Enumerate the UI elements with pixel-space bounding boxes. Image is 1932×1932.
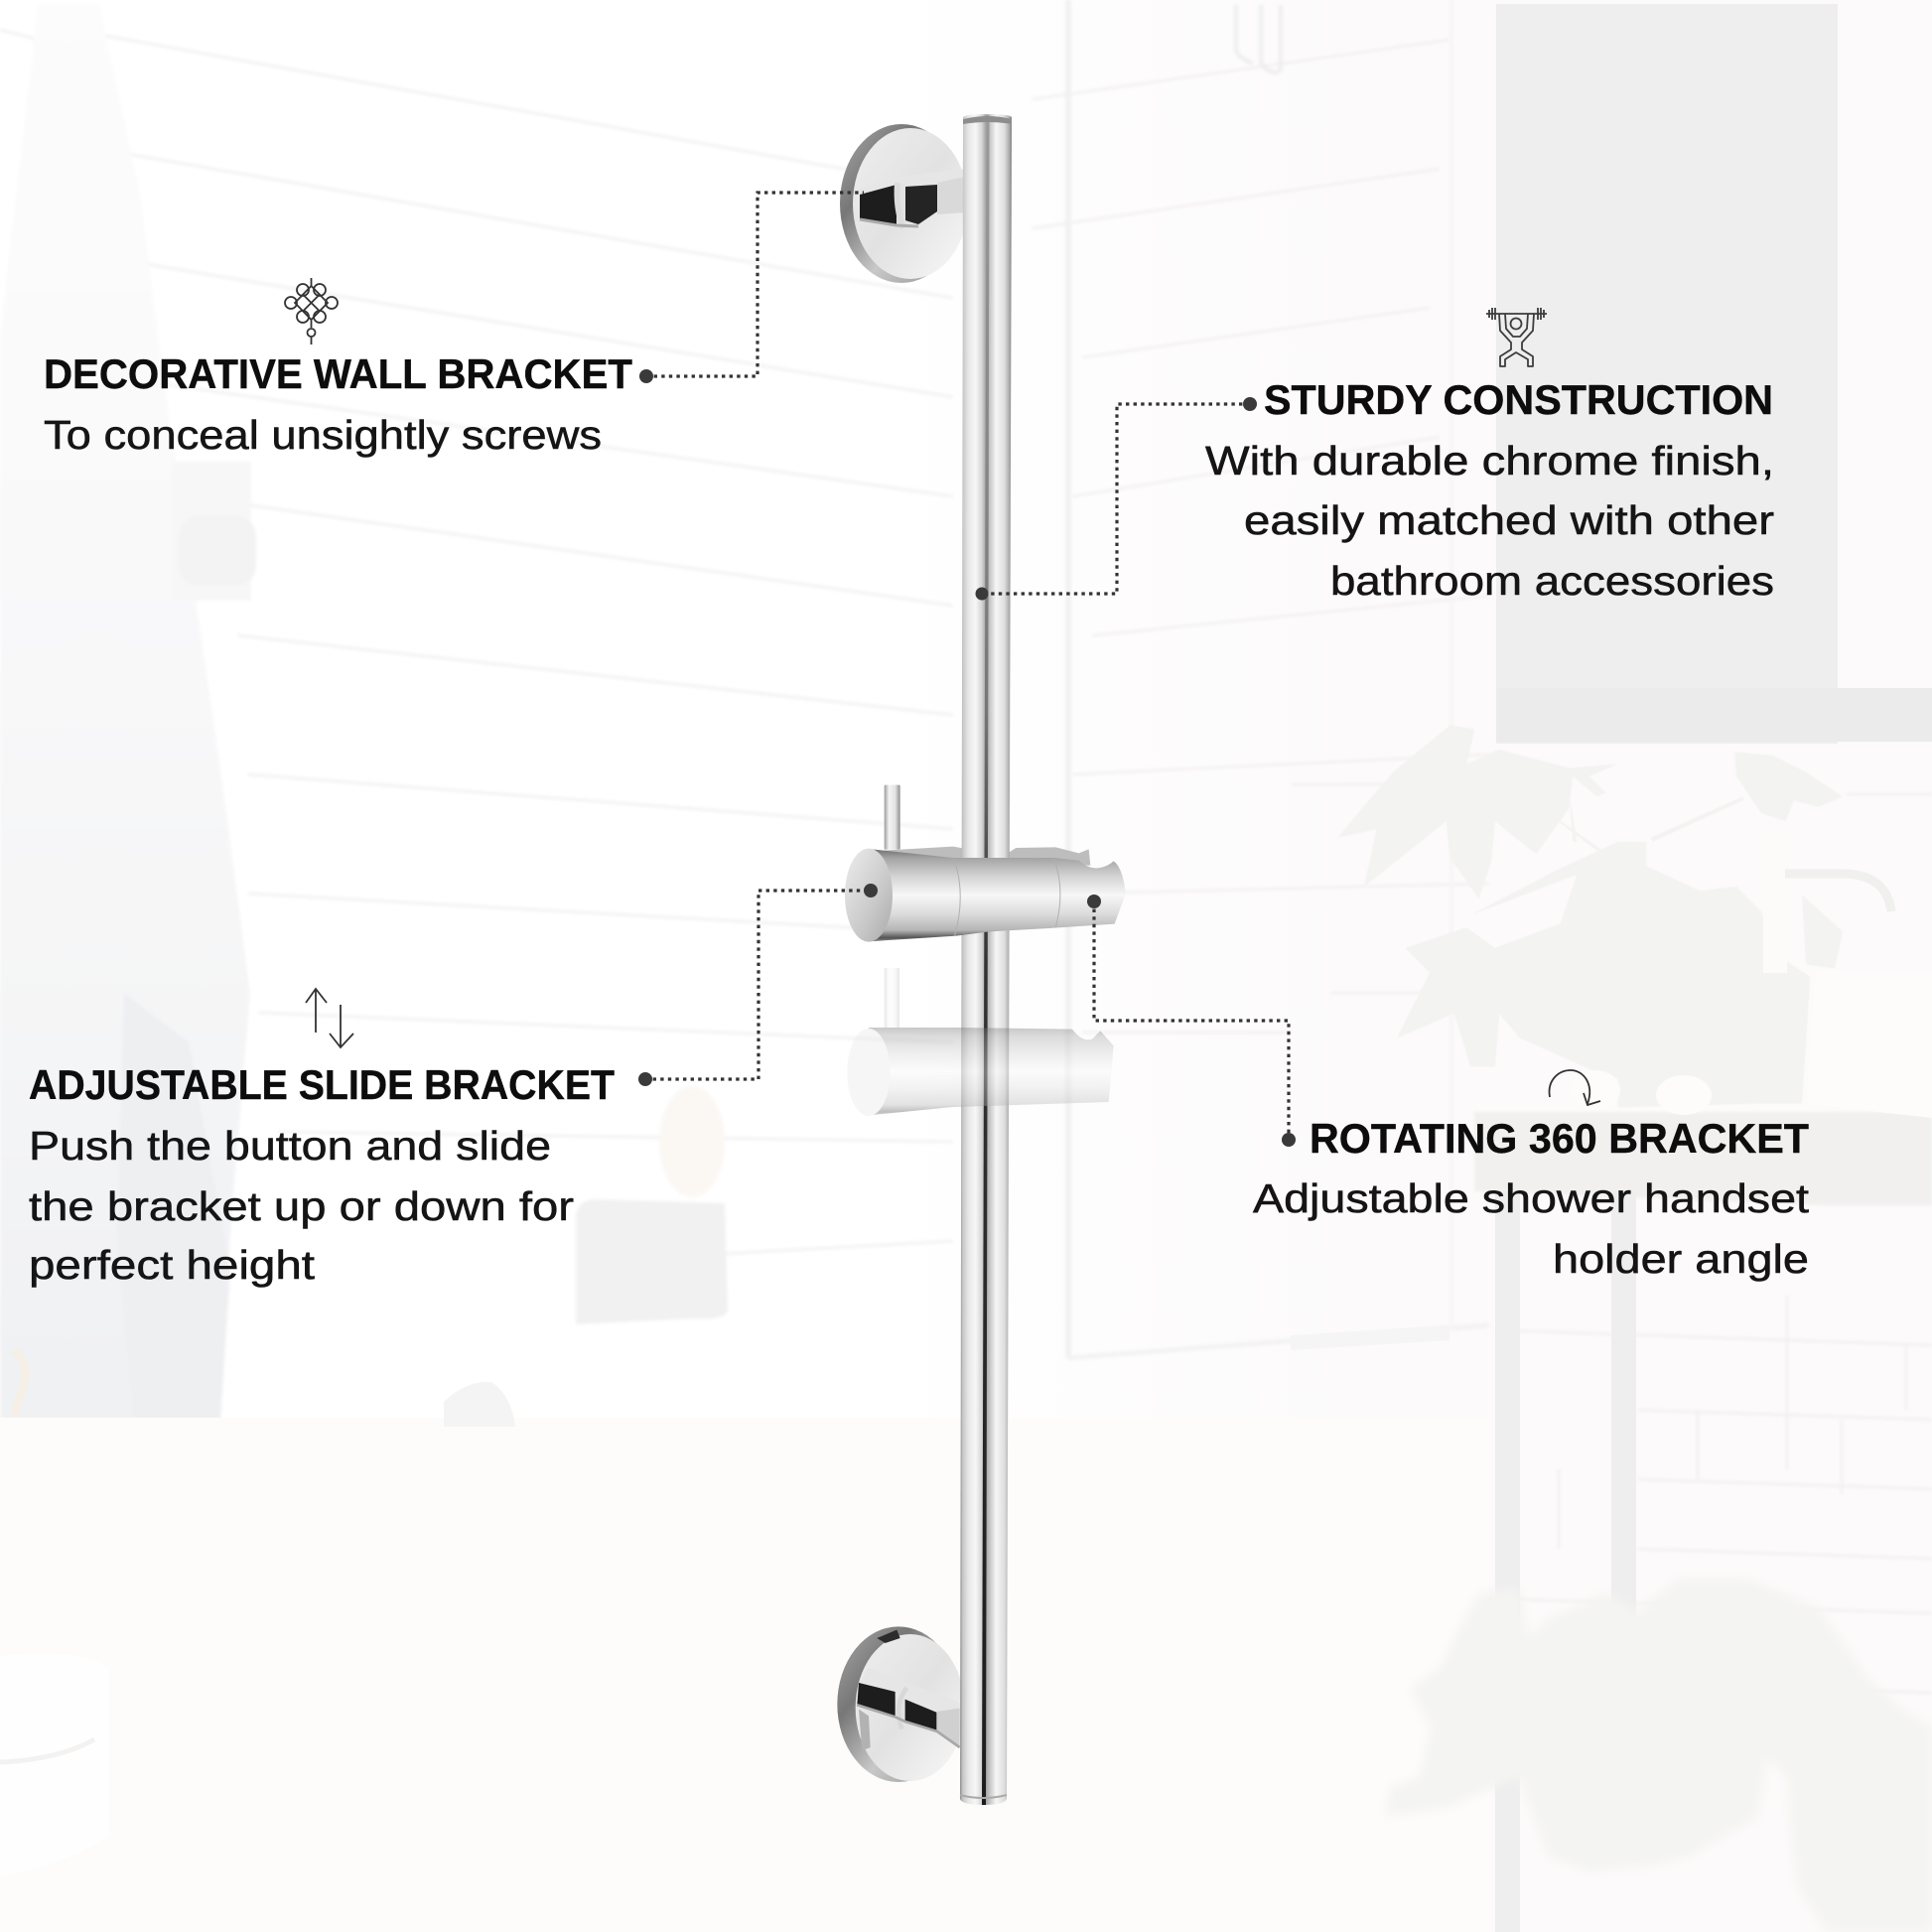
background: brush and cup — [576, 1086, 728, 1324]
text: sturdy construction line 1: With durable chrome finish, — [1205, 438, 1774, 483]
rail top cap — [963, 116, 1012, 124]
background: hanging towel — [0, 4, 250, 1420]
bottom bracket arm underside — [857, 1705, 960, 1747]
background: towel holder — [172, 462, 256, 601]
text: slide bracket line 1: Push the button and slide — [29, 1123, 551, 1169]
slider body — [869, 849, 1126, 941]
bottom bracket ring — [898, 1688, 906, 1729]
callout connector: sturdy construction — [975, 397, 1257, 600]
text: rotating bracket line 2: holder angle — [1553, 1236, 1809, 1282]
top wall bracket — [840, 124, 968, 283]
bottom bracket arm tip — [936, 1709, 960, 1746]
icon: rotation arrow — [1550, 1070, 1600, 1105]
background: shower glass frame — [1068, 0, 1489, 1358]
text: sturdy construction line 2: easily matched with other — [1244, 497, 1774, 543]
bottom bracket screw reflection — [859, 1710, 871, 1750]
rail bottom ring — [960, 1795, 1007, 1798]
slider seams — [954, 859, 1060, 936]
background: counter band and stand legs — [1291, 1112, 1932, 1932]
heading: sturdy construction: STURDY CONSTRUCTION — [1264, 376, 1773, 423]
text: slide bracket line 3: perfect height — [29, 1242, 316, 1288]
text: sturdy construction line 3: bathroom accessories — [1330, 558, 1774, 604]
callout connector: wall bracket — [639, 193, 864, 383]
bottom bracket arm reflection — [857, 1683, 896, 1717]
main rail — [960, 114, 1012, 1805]
slider top collar — [884, 783, 1090, 866]
background: lower plant — [1385, 1579, 1932, 1932]
bottom wall bracket — [837, 1626, 965, 1782]
callout connector: rotating bracket — [1087, 895, 1296, 1147]
heading: rotating 360 bracket: ROTATING 360 BRACKET — [1310, 1115, 1809, 1162]
slider bracket — [845, 849, 1126, 942]
background: faucet and sink — [1571, 834, 1932, 1118]
product: shower slide bar — [837, 114, 1126, 1805]
icon: weightlifter — [1486, 308, 1547, 366]
text: slide bracket line 2: the bracket up or down for — [29, 1183, 574, 1229]
icon: up and down arrows — [306, 989, 353, 1047]
background: bathtub — [0, 1350, 1489, 1932]
heading: adjustable slide bracket: ADJUSTABLE SLIDE BRACKET — [29, 1061, 615, 1108]
callout connector: slide bracket — [638, 884, 878, 1086]
bottom bracket arm highlight — [859, 1668, 960, 1712]
heading: decorative wall bracket: DECORATIVE WALL BRACKET — [44, 350, 632, 397]
icon: endless knot — [285, 278, 338, 345]
background: mirror — [1496, 4, 1932, 744]
text: rotating bracket line 1: Adjustable shower handset — [1253, 1175, 1810, 1221]
background: potted plant — [1337, 725, 1843, 1108]
slider ghost position — [847, 968, 1114, 1116]
text: decorative wall bracket description: To conceal unsightly screws — [44, 412, 602, 458]
rail centre reflection — [982, 115, 989, 1805]
slider end cap — [845, 849, 893, 942]
bottom bracket arm reflection — [905, 1700, 937, 1731]
bottom bracket rim highlight — [877, 1630, 900, 1643]
